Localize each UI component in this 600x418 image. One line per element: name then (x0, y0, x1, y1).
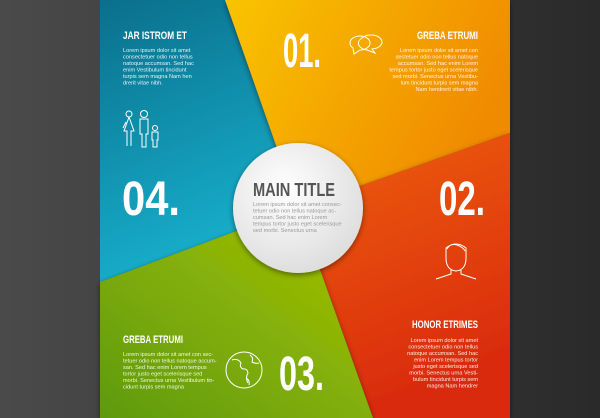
panel: green segment 03 (100, 208, 373, 418)
number 01: 01. (283, 25, 321, 78)
panel: yellow segment 01 (225, 0, 510, 208)
text block: jar istrom et (123, 30, 194, 86)
number 04: 04. (122, 173, 180, 226)
text block: honor etrimes (407, 319, 478, 390)
text block: jar istrom et: enim Vestibulum tincidunt (123, 68, 187, 74)
text block: honor etrimes: natoque accumsan. Sed hac (407, 351, 478, 357)
text block: jar istrom et: JAR ISTROM ET (123, 30, 187, 42)
text block: greba etrumi bottom: cidunt turpis sem magna (123, 384, 185, 390)
text block: greba etrumi bottom (123, 334, 217, 390)
icon: speech bubbles (350, 35, 382, 54)
center body text: cumsan. Sed hac enim Lorem (253, 215, 328, 221)
icon: globe (226, 352, 262, 388)
text block: greba etrumi bottom: Lorem ipsum dolor sit amet con sec- (123, 352, 213, 358)
text block: honor etrimes: enim Lorem tempus tortor (414, 358, 478, 364)
text block: jar istrom et: Lorem ipsum dolor sit amet (123, 48, 191, 54)
text block: honor etrimes: justo eget scelerisque sed (412, 364, 478, 370)
text block: honor etrimes: HONOR ETRIMES (412, 319, 478, 331)
text block: greba etrumi bottom: GREBA ETRUMI (123, 334, 183, 346)
text block: greba etrumi top: accumsan. Sed hac enim Lorem (398, 61, 478, 67)
text block: greba etrumi bottom: san. Sed hac enim Lorem tempus (123, 365, 207, 371)
text block: jar istrom et: drerit vitae nibh. (123, 80, 163, 86)
number 02: 02. (439, 173, 485, 226)
center body text: sed morbi. Senectus urna (253, 228, 318, 234)
main title: MAIN TITLE (253, 180, 335, 200)
panel: red segment 02 (298, 133, 510, 418)
center body text: tempus tortor justo eget scelerisque (253, 222, 342, 228)
panel: teal segment 04 (100, 0, 298, 282)
icon: person head (436, 244, 476, 279)
text block: greba etrumi bottom: tortor justo eget scelerisque sed (123, 372, 202, 378)
text block: honor etrimes: magna Nam hendrer (427, 384, 478, 390)
text block: jar istrom et: natoque accumsan. Sed hac (123, 61, 194, 67)
text block: jar istrom et: consectetuer odio non tellus (123, 54, 193, 60)
number 03: 03. (279, 348, 324, 401)
icon: family (123, 110, 158, 147)
text block: greba etrumi bottom: tetuer odio non tellus natoque accum- (123, 358, 217, 364)
text block: honor etrimes: morbi. Senectus urna Vesti- (409, 370, 478, 376)
text block: greba etrumi top: tempus tortor justo eget scelerisque (389, 68, 478, 74)
text block: jar istrom et: turpis sem magna Nam hen (123, 74, 192, 80)
text block: greba etrumi top: sectetuer odio non tellus natoque (396, 54, 478, 60)
text block: honor etrimes: bulum tincidunt turpis sem (413, 377, 478, 383)
text block: greba etrumi top: lum tincidunt turpis sem magna (401, 80, 479, 86)
center circle (233, 143, 363, 273)
text block: honor etrimes: Lorem ipsum dolor sit amet (411, 338, 478, 344)
text block: greba etrumi top: Lorem ipsum dolor sit amet con (400, 48, 478, 54)
text block: greba etrumi top: sed morbi. Senectus urna Vestibu- (392, 74, 478, 80)
text block: greba etrumi bottom: morbi. Senectus urna Vestibulum tin- (123, 378, 215, 384)
text block: honor etrimes: consectetuer odio non tellus (408, 344, 478, 350)
center body text: tetuer odio non tellus natoque ac- (253, 208, 336, 214)
center body text (253, 202, 342, 234)
text block: greba etrumi top (389, 30, 479, 93)
text block: greba etrumi top: Nam hendrerit vitae nibh. (416, 87, 478, 93)
text block: greba etrumi top: GREBA ETRUMI (417, 30, 478, 42)
center body text: Lorem ipsum dolor sit amet consec- (253, 202, 342, 208)
